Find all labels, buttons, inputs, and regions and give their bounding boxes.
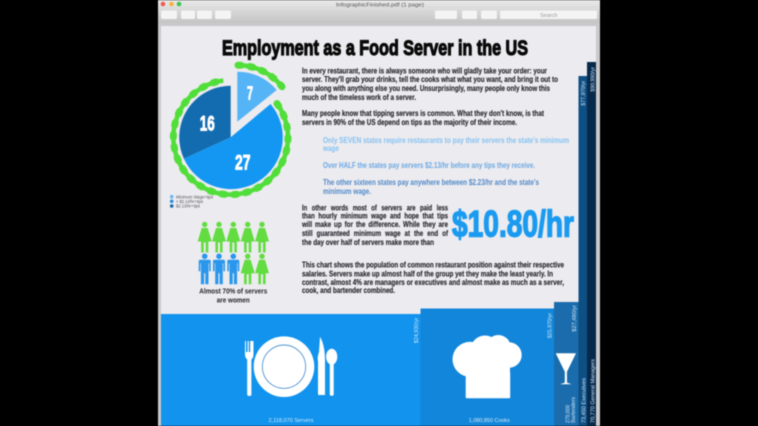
chart description paragraph: salaries. Servers make up almost half of the group yet they make the least yearly. In bbox=[302, 269, 553, 278]
pie labels: 16 bbox=[200, 112, 215, 136]
label: general managers salary: $90,990/yr bbox=[590, 67, 596, 92]
label: servers count: 2,118,070 Servers bbox=[268, 418, 314, 424]
minimum wage paragraph: the day over half of servers make more than bbox=[302, 238, 434, 247]
wavy ring bbox=[173, 65, 288, 195]
label: servers salary: $24,930/yr bbox=[414, 318, 420, 343]
pie legend: $2.13/hr+tips bbox=[176, 204, 200, 209]
intro paragraph: much of the timeless work of a server. bbox=[302, 93, 416, 102]
pie labels: 27 bbox=[235, 152, 250, 174]
label: bartenders salary: $27,480/yr bbox=[572, 305, 578, 332]
window background bbox=[158, 0, 600, 426]
chart description paragraph: contrast, almost 4% are managers or executives and almost make as much as a server, bbox=[302, 278, 564, 287]
pictogram: women and men bbox=[198, 222, 269, 284]
label: bartenders count: Bartenders bbox=[571, 397, 577, 423]
pictogram caption: Almost 70% of servers bbox=[199, 287, 267, 296]
callout: seven states bbox=[322, 136, 569, 153]
minimum wage paragraph bbox=[301, 203, 448, 247]
big number: $10.80/hr bbox=[452, 204, 574, 244]
chart description paragraph: cook, and bartender combined. bbox=[302, 286, 395, 295]
callout: seven states: Only SEVEN states require restaurants to pay their servers the state's minimum bbox=[323, 136, 569, 145]
tipping paragraph: Many people know that tipping servers is common. What they don't know, is that bbox=[302, 109, 544, 118]
minimum wage paragraph: still guaranteed minimum wage at the end of bbox=[302, 229, 448, 238]
minimum wage paragraph: In other words most of servers are paid less bbox=[302, 203, 448, 212]
pictogram caption: are women bbox=[217, 295, 250, 304]
callout: sixteen states: minimum wage. bbox=[323, 187, 371, 196]
window toolbar: InfographicFinished.pdf (1 page) bbox=[336, 2, 424, 8]
pie labels: 7 bbox=[247, 84, 253, 104]
label: cooks salary: $25,970/yr bbox=[548, 313, 554, 338]
pie labels bbox=[200, 84, 253, 174]
callout: seven states: wage bbox=[322, 144, 339, 153]
pie slice: 16 states bbox=[179, 86, 231, 159]
intro paragraph bbox=[302, 66, 558, 102]
tipping paragraph: servers in 90% of the US depend on tips as the majority of their income. bbox=[302, 118, 517, 127]
pie legend bbox=[170, 194, 213, 209]
label: executives count: 73,450 Executives bbox=[582, 378, 588, 423]
pictogram caption bbox=[199, 287, 267, 304]
minimum wage paragraph: will make up for the difference. While they are bbox=[301, 220, 448, 229]
callout: sixteen states bbox=[323, 178, 539, 196]
icon: martini glass bbox=[556, 353, 576, 384]
callout: sixteen states: The other sixteen states pay anywhere between $2.23/hr and the state's bbox=[323, 178, 539, 187]
bar: executives bbox=[578, 76, 588, 426]
pie chart bbox=[173, 65, 288, 195]
icon: plate and cutlery bbox=[245, 336, 337, 397]
pie slice: 7 states bbox=[237, 72, 277, 122]
window toolbar: Search bbox=[540, 13, 557, 19]
intro paragraph: In every restaurant, there is always someone who will gladly take your order: your bbox=[302, 66, 547, 76]
window toolbar bbox=[158, 0, 600, 23]
title: Employment as a Food Server in the US bbox=[222, 36, 528, 60]
intro paragraph: server. They'll grab your drinks, tell the cooks what what you want, and bring it out to bbox=[302, 75, 558, 84]
chart description paragraph: This chart shows the population of common restaurant position against their respective bbox=[302, 261, 564, 270]
label: bartenders count bbox=[566, 397, 577, 423]
bar: servers bbox=[161, 314, 421, 426]
tipping paragraph bbox=[302, 109, 544, 127]
intro paragraph: you along with anything else you need. Unsurprisingly, many people only know this bbox=[302, 84, 550, 93]
minimum wage paragraph: than hourly minimum wage and hope that tips bbox=[302, 212, 448, 221]
label: executives salary: $77,970/yr bbox=[581, 81, 587, 106]
bar: bartenders bbox=[554, 302, 579, 426]
icon: chef hat bbox=[452, 335, 522, 398]
callout: half the states: Over HALF the states pay servers $2.13/hr before any tips they receive. bbox=[323, 161, 535, 170]
label: bartenders count: 279,000 bbox=[566, 405, 572, 423]
bar: general managers bbox=[587, 62, 596, 426]
chart description paragraph bbox=[302, 261, 564, 295]
bar: cooks bbox=[420, 308, 554, 426]
label: general managers count: 70,770 General Managers bbox=[590, 359, 596, 423]
pie legend: Minimum Wage+tips bbox=[176, 194, 213, 199]
pie legend: > $2.14/hr+tips bbox=[176, 199, 203, 204]
label: cooks count: 1,080,850 Cooks bbox=[469, 418, 510, 424]
pie slice: 27 states bbox=[184, 104, 283, 189]
page background bbox=[161, 26, 596, 426]
